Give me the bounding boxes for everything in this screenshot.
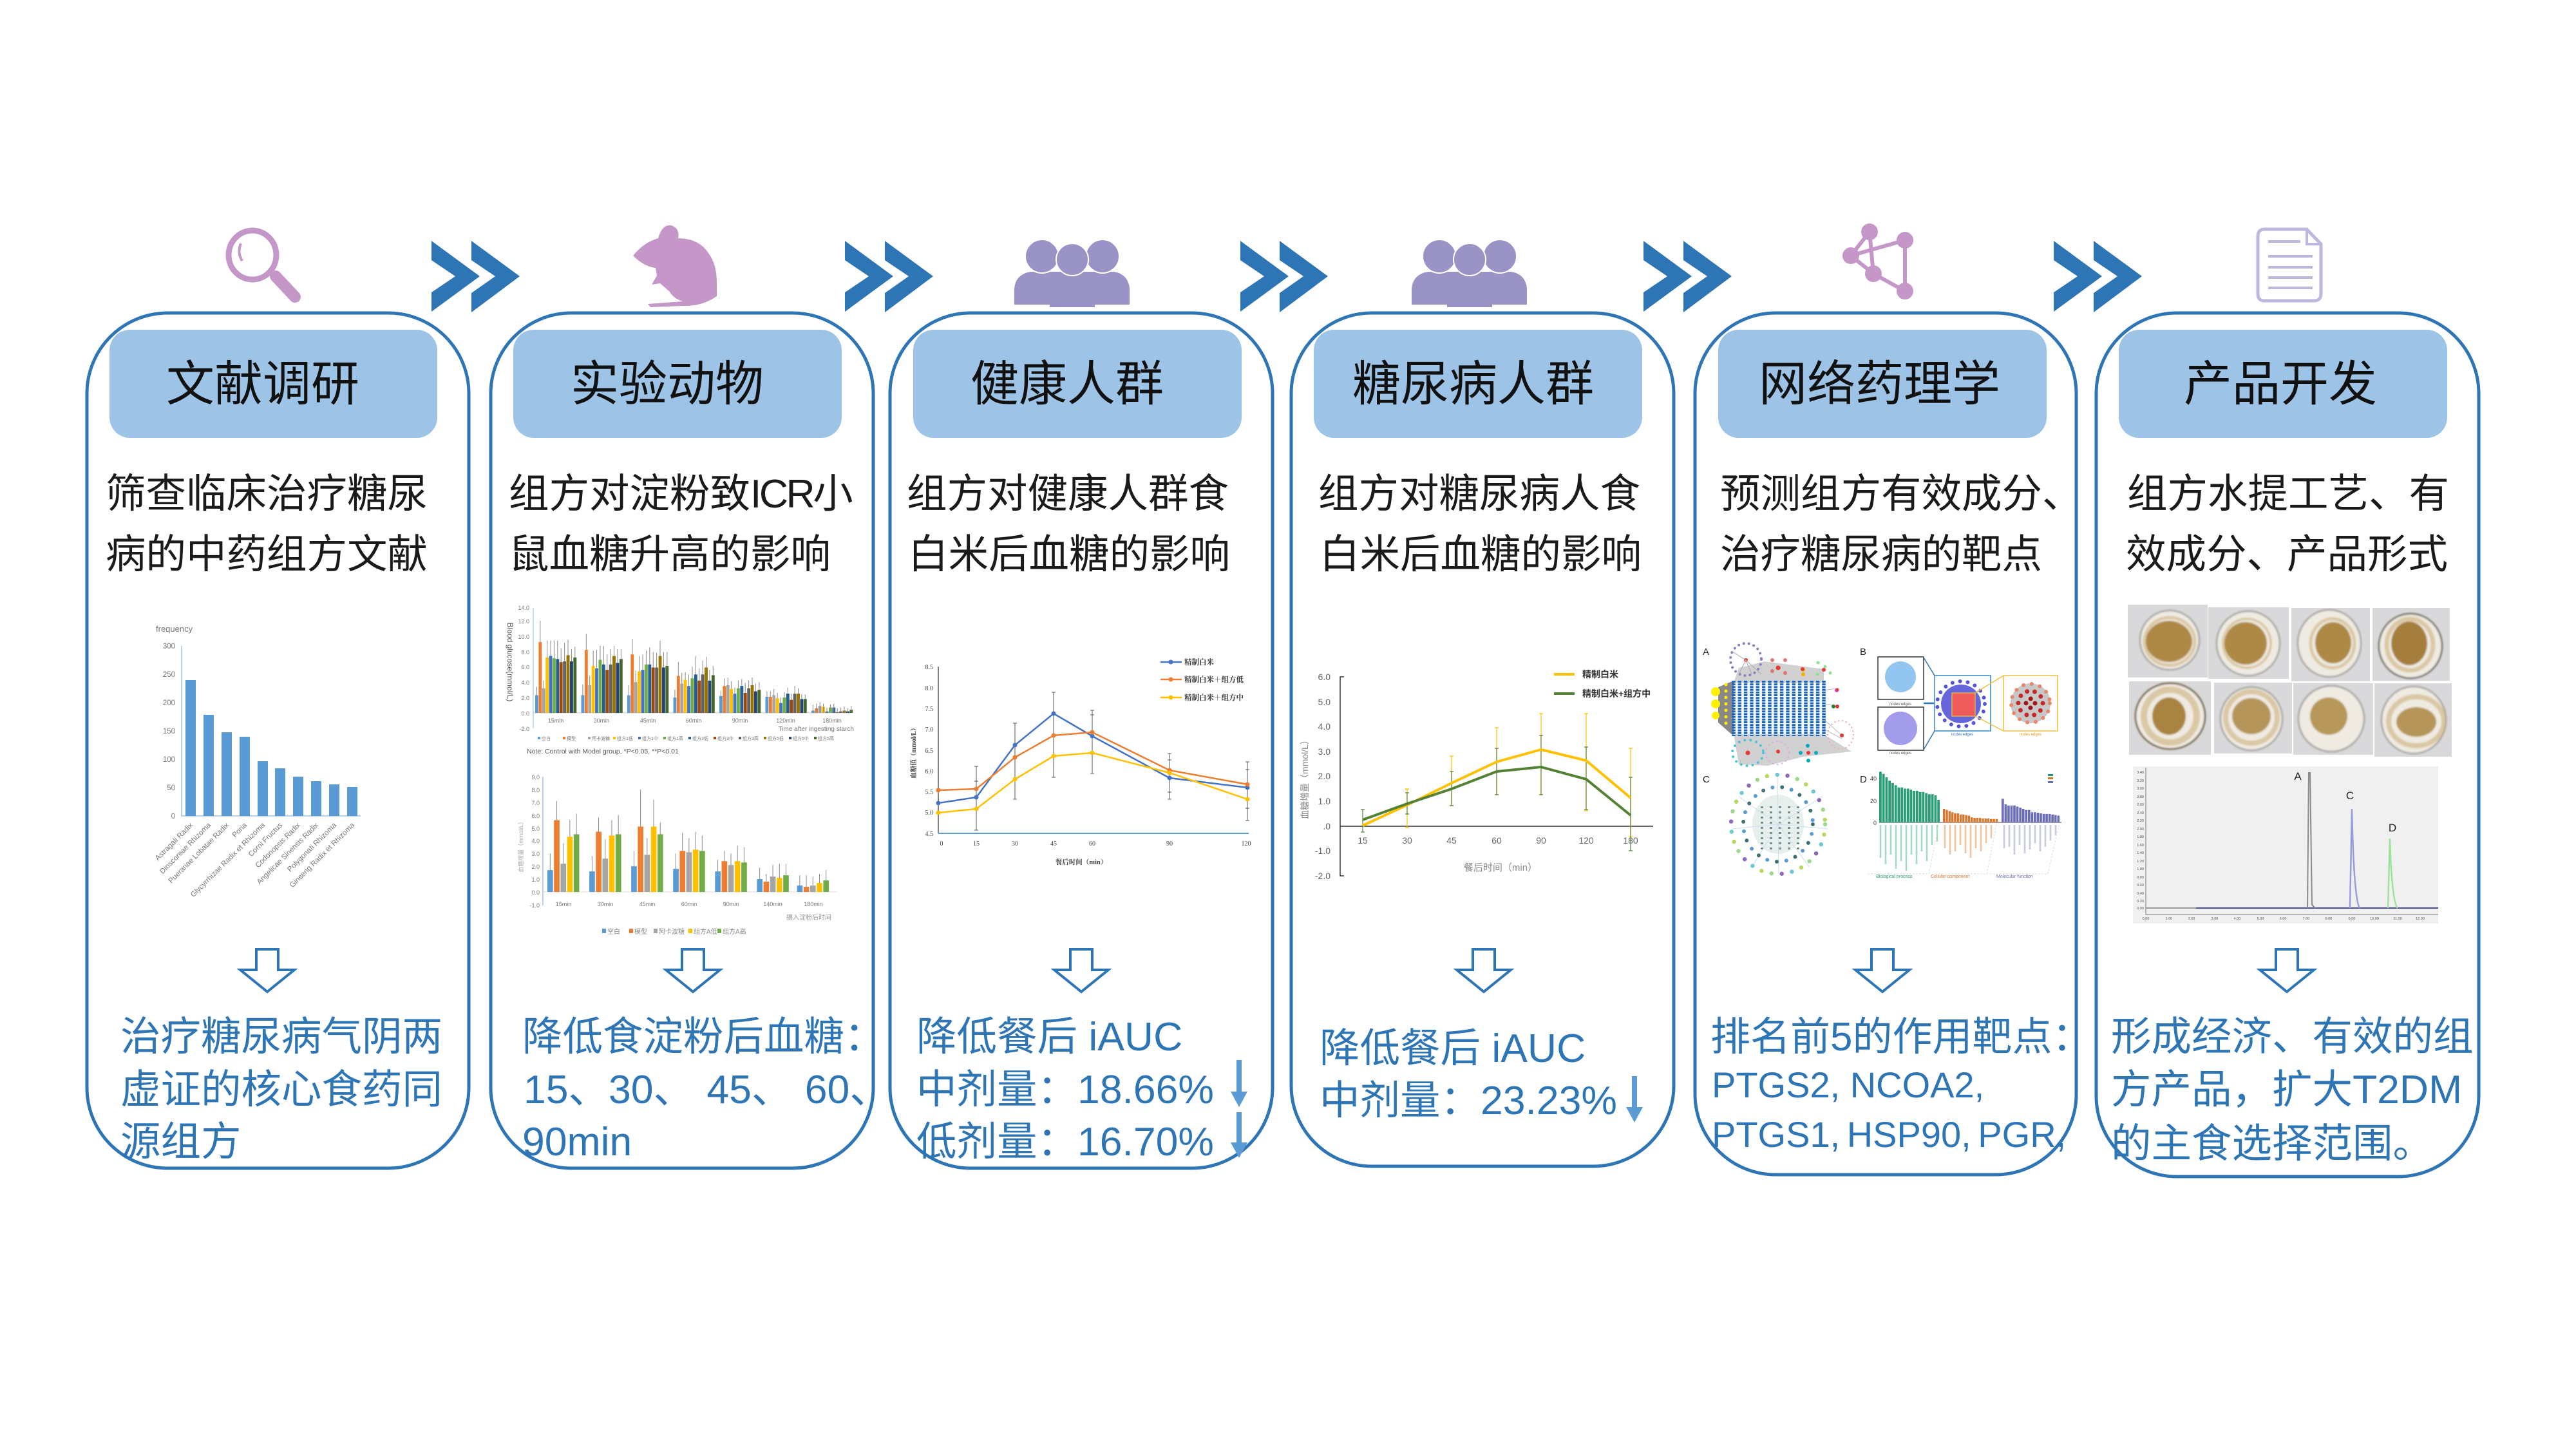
- heading pill: [1314, 330, 1642, 438]
- conclusion text: 虚证的核心食药同: [120, 1067, 442, 1112]
- chart: HPLC chromatogram: 2.40: [2137, 811, 2144, 815]
- icon: magnifier: [229, 231, 295, 297]
- bar chart: herb frequency: [154, 624, 361, 899]
- chart: HPLC chromatogram: 3.40: [2137, 771, 2144, 775]
- bar chart: blood glucose, 5 groups: 5.0: [531, 826, 540, 832]
- line chart: healthy subjects: 45: [1050, 840, 1057, 848]
- arrow: down: [1457, 949, 1511, 992]
- arrow: down: [240, 949, 294, 992]
- arrow: chevrons 2 to 3: [845, 241, 933, 312]
- chart: HPLC chromatogram: A: [2294, 770, 2302, 782]
- panel outline: [890, 313, 1273, 1168]
- bar chart: blood glucose, 5 groups: 4.0: [531, 838, 540, 844]
- conclusion text: PTGS2, NCOA2,: [1712, 1065, 1984, 1105]
- arrow: down: [1855, 949, 1909, 992]
- chart: HPLC chromatogram: 0.80: [2137, 876, 2144, 880]
- figure C: target-pathway circle network: [1703, 774, 1828, 874]
- conclusion text: 形成经济、有效的组: [2111, 1014, 2473, 1059]
- figure B: PPI network filtering: nodes edges: [2020, 733, 2041, 737]
- arrow: down: [1054, 949, 1108, 992]
- panel: 网络药理学: [1695, 313, 2092, 1175]
- bar chart: blood glucose, 12 groups: 组方3低: [692, 735, 708, 741]
- bar chart: herb frequency: Ginseng Radix et Rhizoma: [289, 821, 357, 889]
- line chart: diabetic subjects: 120: [1578, 835, 1594, 846]
- bar chart: herb frequency: Puerariae Lobatae Radix: [167, 821, 231, 885]
- panel outline: [1695, 313, 2076, 1175]
- line chart: diabetic subjects: 2.0: [1318, 771, 1331, 781]
- arrow: decrease low dose: [1231, 1112, 1247, 1158]
- figure D: GO enrichment bars: 20: [1870, 798, 1877, 804]
- conclusion text: 方产品，扩大T2DM: [2111, 1067, 2462, 1112]
- line chart: healthy subjects: 8.0: [925, 685, 933, 692]
- bar chart: herb frequency: 250: [163, 671, 175, 679]
- bar chart: blood glucose, 5 groups: 血糖增量（mmol/L）: [517, 819, 524, 873]
- line chart: healthy subjects: 精制白米＋组方低: [1184, 675, 1244, 684]
- panel outline: [491, 313, 873, 1168]
- chart: HPLC chromatogram: 1.40: [2137, 851, 2144, 855]
- bar chart: blood glucose, 12 groups: 45min: [640, 717, 656, 724]
- bar chart: blood glucose, 5 groups: 6.0: [531, 813, 540, 819]
- figure B: PPI network filtering: nodes edges: [1951, 733, 1973, 737]
- bar chart: blood glucose, 5 groups: 90min: [723, 901, 739, 907]
- arrow: chevrons 5 to 6: [2054, 241, 2142, 312]
- bar chart: blood glucose, 12 groups: -2.0: [519, 726, 529, 732]
- chart: HPLC chromatogram: 2.00: [2137, 828, 2144, 831]
- chart: HPLC chromatogram: 6.00: [2280, 917, 2286, 921]
- bar chart: herb frequency: Polygonati Rhizoma: [286, 821, 339, 873]
- conclusion text: 15、30、 45、 60、: [524, 1067, 890, 1112]
- line chart: diabetic subjects: 餐后时间（min）: [1464, 862, 1537, 873]
- bar chart: blood glucose, 5 groups: 3.0: [531, 851, 540, 857]
- figure: network pharmacology panels: [1703, 643, 2061, 879]
- figure D: GO enrichment bars: [1860, 772, 2061, 879]
- line chart: healthy subjects: 血糖值（mmol/L）: [909, 724, 918, 779]
- description: 筛查临床治疗糖尿: [106, 471, 428, 516]
- heading pill: 产品开发: [2184, 357, 2377, 411]
- line chart: diabetic subjects: 血糖增量（mmol/L）: [1300, 735, 1310, 819]
- chart: HPLC chromatogram: D: [2389, 822, 2396, 834]
- panel outline: [1291, 313, 1674, 1166]
- bar chart: herb frequency: Angelicae Sinensis Radix: [256, 821, 320, 886]
- figure D: GO enrichment bars: 40: [1870, 775, 1877, 782]
- heading pill: 健康人群: [971, 357, 1164, 411]
- chart: HPLC chromatogram: 8.00: [2325, 917, 2332, 921]
- description: 组方对淀粉致ICR小: [509, 471, 853, 516]
- line chart: healthy subjects: 30: [1012, 840, 1018, 848]
- panel: 实验动物: [491, 313, 890, 1168]
- chart: HPLC chromatogram: 11.00: [2393, 917, 2402, 921]
- conclusion text: 低剂量：16.70%: [916, 1119, 1214, 1164]
- chart: HPLC chromatogram: 3.20: [2137, 779, 2144, 783]
- arrow: chevrons 4 to 5: [1643, 241, 1732, 312]
- bar chart: blood glucose, 5 groups: 60min: [681, 901, 697, 907]
- chart: HPLC chromatogram: 7.00: [2303, 917, 2309, 921]
- bar chart: blood glucose, 5 groups: 2.0: [531, 864, 540, 870]
- figure D: GO enrichment bars: Cellular component: [1931, 875, 1969, 879]
- bar chart: herb frequency: 150: [163, 728, 175, 735]
- line chart: healthy subjects: 60: [1089, 840, 1095, 848]
- bar chart: herb frequency: 0: [171, 813, 175, 820]
- bar chart: blood glucose, 5 groups: 45min: [639, 901, 655, 907]
- icon: network: [1842, 223, 1913, 299]
- bar chart: blood glucose, 12 groups: 4.0: [521, 679, 529, 686]
- figure C: target-pathway circle network: C: [1703, 774, 1710, 785]
- line chart: diabetic subjects: 3.0: [1318, 746, 1331, 757]
- chart: HPLC chromatogram: 10.00: [2370, 917, 2379, 921]
- photos: extract powder in dishes: [2128, 605, 2452, 757]
- bar chart: herb frequency: Codonopsis Radix: [254, 821, 302, 869]
- bar chart: blood glucose, 12 groups: 60min: [686, 717, 701, 724]
- description: 组方水提工艺、有: [2127, 471, 2449, 516]
- bar chart: blood glucose, 5 groups: 30min: [598, 901, 613, 907]
- conclusion text: 中剂量：23.23%: [1320, 1078, 1617, 1123]
- heading pill: 文献调研: [166, 357, 359, 411]
- line chart: diabetic subjects: [1300, 669, 1653, 881]
- figure B: PPI network filtering: nodes edges: [1889, 703, 1911, 706]
- chart: HPLC chromatogram: 5.00: [2257, 917, 2264, 921]
- figure A: compound-target network: A: [1703, 647, 1709, 658]
- icon: document: [2258, 229, 2321, 301]
- line chart: healthy subjects: 6.0: [925, 768, 933, 775]
- bar chart: herb frequency: 100: [163, 756, 175, 764]
- heading pill: 网络药理学: [1759, 357, 2000, 411]
- chart: HPLC chromatogram: 3.00: [2137, 787, 2144, 791]
- description: 病的中药组方文献: [106, 532, 428, 577]
- bar chart: herb frequency: Dioscoreae Rhizoma: [158, 821, 213, 876]
- line chart: diabetic subjects: 45: [1446, 835, 1457, 846]
- bar chart: blood glucose, 12 groups: 0.0: [521, 710, 529, 717]
- figure D: GO enrichment bars: Molecular function: [1996, 875, 2033, 879]
- line chart: healthy subjects: 6.5: [925, 748, 933, 755]
- bar chart: blood glucose, 12 groups: 180min: [822, 717, 842, 724]
- panel: 产品开发: [2096, 313, 2479, 1177]
- bar chart: blood glucose, 12 groups: 组方1中: [642, 735, 658, 741]
- bar chart: blood glucose, 12 groups: 8.0: [521, 649, 529, 656]
- line chart: diabetic subjects: -1.0: [1315, 846, 1331, 856]
- panel: 文献调研: [87, 313, 469, 1168]
- bar chart: blood glucose, 5 groups: 组方A低: [694, 927, 717, 936]
- figure D: GO enrichment bars: 0: [1873, 820, 1877, 826]
- bar chart: blood glucose, 12 groups: [506, 605, 854, 755]
- description: 组方对健康人群食: [907, 471, 1229, 516]
- chart: HPLC chromatogram: 1.60: [2137, 844, 2144, 848]
- bar chart: herb frequency: Poria: [231, 821, 249, 839]
- line chart: healthy subjects: 5.0: [925, 810, 933, 817]
- conclusion text: 90min: [522, 1119, 632, 1164]
- line chart: diabetic subjects: 5.0: [1318, 697, 1331, 707]
- chart: HPLC chromatogram: 2.80: [2137, 795, 2144, 799]
- description: 组方对糖尿病人食: [1318, 471, 1640, 516]
- line chart: healthy subjects: 4.5: [925, 831, 933, 838]
- description: 白米后血糖的影响: [1320, 532, 1642, 577]
- bar chart: herb frequency: 200: [163, 699, 175, 707]
- chart: HPLC chromatogram: C: [2346, 790, 2354, 802]
- bar chart: blood glucose, 12 groups: Blood glucose(mmol/L): [506, 623, 515, 701]
- description: 治疗糖尿病的靶点: [1720, 532, 2042, 577]
- icon: diabetic people group: [1412, 240, 1527, 307]
- bar chart: blood glucose, 12 groups: 组方5中: [793, 735, 809, 741]
- line chart: healthy subjects: 90: [1166, 840, 1173, 848]
- bar chart: blood glucose, 12 groups: 120min: [776, 717, 795, 724]
- bar chart: blood glucose, 12 groups: Note: Control with Model group, *P<0.05, **P<0.01: [527, 748, 679, 755]
- arrow: decrease: [1626, 1076, 1643, 1122]
- line chart: diabetic subjects: 15: [1358, 835, 1368, 846]
- heading pill: 实验动物: [571, 357, 764, 411]
- bar chart: blood glucose, 5 groups: 组方A高: [723, 927, 746, 936]
- line chart: healthy subjects: 餐后时间（min）: [1056, 858, 1107, 866]
- bar chart: blood glucose, 5 groups: 8.0: [531, 787, 540, 793]
- line chart: healthy subjects: 精制白米: [1184, 658, 1214, 667]
- chart: HPLC chromatogram: 1.00: [2166, 917, 2172, 921]
- arrow: chevrons 1 to 2: [431, 241, 520, 312]
- bar chart: blood glucose, 12 groups: 6.0: [521, 664, 529, 670]
- bar chart: blood glucose, 5 groups: [517, 774, 837, 936]
- chart: HPLC chromatogram: 0.40: [2137, 892, 2144, 896]
- line chart: diabetic subjects: 90: [1536, 835, 1546, 846]
- line chart: diabetic subjects: 4.0: [1318, 721, 1331, 732]
- line chart: diabetic subjects: 60: [1492, 835, 1502, 846]
- bar chart: blood glucose, 12 groups: 14.0: [518, 605, 529, 611]
- chart: HPLC chromatogram: 12.00: [2416, 917, 2425, 921]
- conclusion text: 降低餐后 iAUC: [916, 1014, 1182, 1059]
- conclusion text: 排名前5的作用靶点：: [1710, 1015, 2092, 1059]
- line chart: healthy subjects: 7.0: [925, 726, 933, 734]
- chart: HPLC chromatogram: 2.20: [2137, 819, 2144, 823]
- conclusion text: 的主食选择范围。: [2111, 1121, 2433, 1166]
- bar chart: blood glucose, 5 groups: 0.0: [531, 889, 540, 896]
- bar chart: blood glucose, 12 groups: 阿卡波糖: [592, 735, 610, 741]
- bar chart: herb frequency: Corni Fructus: [247, 821, 284, 858]
- heading pill: 糖尿病人群: [1352, 357, 1594, 411]
- line chart: diabetic subjects: 1.0: [1318, 796, 1331, 806]
- line chart: healthy subjects: 120: [1242, 840, 1251, 848]
- bar chart: blood glucose, 5 groups: 1.0: [531, 876, 540, 883]
- chart: HPLC chromatogram: 2.00: [2188, 917, 2195, 921]
- line chart: healthy subjects: [909, 658, 1251, 866]
- panel outline: [87, 313, 469, 1168]
- bar chart: blood glucose, 12 groups: 组方1低: [617, 735, 633, 741]
- line chart: healthy subjects: 8.5: [925, 664, 933, 671]
- bar chart: blood glucose, 12 groups: 组方5高: [818, 735, 834, 741]
- line chart: healthy subjects: 5.5: [925, 789, 933, 796]
- icon: mouse: [633, 225, 717, 307]
- arrow: chevrons 3 to 4: [1240, 241, 1328, 312]
- bar chart: blood glucose, 12 groups: 模型: [567, 735, 576, 741]
- chart: HPLC chromatogram: 0.00: [2143, 917, 2149, 921]
- figure A: compound-target network: [1703, 643, 1853, 766]
- chart: HPLC chromatogram: [2133, 766, 2438, 923]
- chart: HPLC chromatogram: 3.00: [2211, 917, 2218, 921]
- bar chart: blood glucose, 12 groups: 组方5低: [768, 735, 784, 741]
- bar chart: herb frequency: 50: [167, 784, 175, 792]
- icon: healthy people group: [1014, 240, 1130, 307]
- bar chart: blood glucose, 5 groups: 9.0: [531, 774, 540, 781]
- bar chart: herb frequency: frequency: [156, 624, 193, 634]
- line chart: diabetic subjects: .0: [1323, 821, 1331, 831]
- conclusion text: 降低餐后 iAUC: [1320, 1026, 1586, 1071]
- bar chart: blood glucose, 12 groups: 2.0: [521, 695, 529, 701]
- description: 预测组方有效成分、: [1720, 471, 2083, 516]
- bar chart: blood glucose, 12 groups: Time after ingesting starch: [779, 726, 854, 733]
- conclusion text: 降低食淀粉后血糖：: [522, 1014, 885, 1059]
- line chart: healthy subjects: 15: [973, 840, 980, 848]
- figure B: PPI network filtering: B: [1860, 647, 1866, 658]
- chart: HPLC chromatogram: 1.00: [2137, 867, 2144, 871]
- line chart: diabetic subjects: 精制白米: [1582, 669, 1618, 679]
- heading pill: [1718, 330, 2047, 438]
- chart: HPLC chromatogram: 1.20: [2137, 860, 2144, 864]
- bar chart: blood glucose, 12 groups: 15min: [548, 717, 564, 724]
- description: 鼠血糖升高的影响: [509, 532, 831, 577]
- bar chart: herb frequency: 300: [163, 643, 175, 650]
- bar chart: blood glucose, 12 groups: 组方3中: [717, 735, 734, 741]
- chart: HPLC chromatogram: 9.00: [2349, 917, 2355, 921]
- panel outline: [2096, 313, 2479, 1177]
- conclusion text: PTGS1, HSP90, PGR,: [1712, 1114, 2066, 1155]
- bar chart: blood glucose, 5 groups: 阿卡波糖: [659, 927, 685, 936]
- bar chart: blood glucose, 5 groups: 模型: [634, 927, 647, 936]
- bar chart: blood glucose, 5 groups: 摄入淀粉后时间: [786, 913, 831, 922]
- bar chart: blood glucose, 12 groups: 10.0: [518, 634, 529, 640]
- bar chart: blood glucose, 12 groups: 12.0: [518, 618, 529, 625]
- line chart: diabetic subjects: 6.0: [1318, 672, 1331, 682]
- line chart: healthy subjects: 7.5: [925, 706, 933, 713]
- figure B: PPI network filtering: nodes edges: [1889, 752, 1911, 755]
- bar chart: blood glucose, 5 groups: 15min: [556, 901, 571, 907]
- arrow: down: [666, 949, 720, 992]
- heading pill: [2119, 330, 2447, 438]
- bar chart: blood glucose, 12 groups: 空白: [542, 735, 551, 741]
- chart: HPLC chromatogram: 1.80: [2137, 835, 2144, 839]
- bar chart: blood glucose, 5 groups: 180min: [804, 901, 823, 907]
- bar chart: blood glucose, 12 groups: 组方1高: [667, 735, 683, 741]
- figure D: GO enrichment bars: Biological process: [1876, 875, 1913, 879]
- bar chart: blood glucose, 12 groups: 90min: [732, 717, 748, 724]
- heading pill: [513, 330, 842, 438]
- conclusion text: 中剂量：18.66%: [916, 1067, 1214, 1112]
- bar chart: blood glucose, 5 groups: -1.0: [529, 902, 540, 909]
- arrow: down: [2260, 949, 2314, 992]
- bar chart: blood glucose, 5 groups: 空白: [607, 927, 620, 936]
- arrow: decrease medium dose: [1231, 1060, 1247, 1107]
- conclusion text: 源组方: [120, 1119, 241, 1164]
- bar chart: blood glucose, 12 groups: 组方3高: [743, 735, 759, 741]
- heading pill: [109, 330, 437, 438]
- bar chart: blood glucose, 5 groups: 140min: [763, 901, 782, 907]
- conclusion text: 治疗糖尿病气阴两: [120, 1014, 442, 1059]
- chart: HPLC chromatogram: 4.00: [2234, 917, 2240, 921]
- line chart: diabetic subjects: 30: [1402, 835, 1412, 846]
- bar chart: herb frequency: Astragali Radix: [154, 821, 194, 862]
- description: 效成分、产品形式: [2126, 532, 2448, 577]
- chart: HPLC chromatogram: 0.20: [2137, 900, 2144, 904]
- figure B: PPI network filtering: [1860, 647, 2058, 755]
- bar chart: herb frequency: Glycyrrhizae Radix et Rhizoma: [189, 821, 267, 899]
- line chart: diabetic subjects: 180: [1623, 835, 1638, 846]
- line chart: healthy subjects: 精制白米＋组方中: [1184, 693, 1244, 702]
- chart: HPLC chromatogram: 0.00: [2137, 907, 2144, 911]
- panel: 糖尿病人群: [1291, 313, 1674, 1166]
- line chart: diabetic subjects: -2.0: [1315, 871, 1331, 881]
- bar chart: blood glucose, 5 groups: 7.0: [531, 800, 540, 806]
- chart: HPLC chromatogram: 0.60: [2137, 884, 2144, 887]
- line chart: diabetic subjects: 精制白米+组方中: [1582, 688, 1651, 699]
- description: 白米后血糖的影响: [908, 532, 1230, 577]
- chart: HPLC chromatogram: 2.60: [2137, 803, 2144, 807]
- heading pill: [913, 330, 1242, 438]
- bar chart: blood glucose, 12 groups: 30min: [594, 717, 609, 724]
- line chart: healthy subjects: 0: [940, 840, 943, 848]
- panel: 健康人群: [890, 313, 1273, 1168]
- figure D: GO enrichment bars: D: [1860, 774, 1867, 785]
